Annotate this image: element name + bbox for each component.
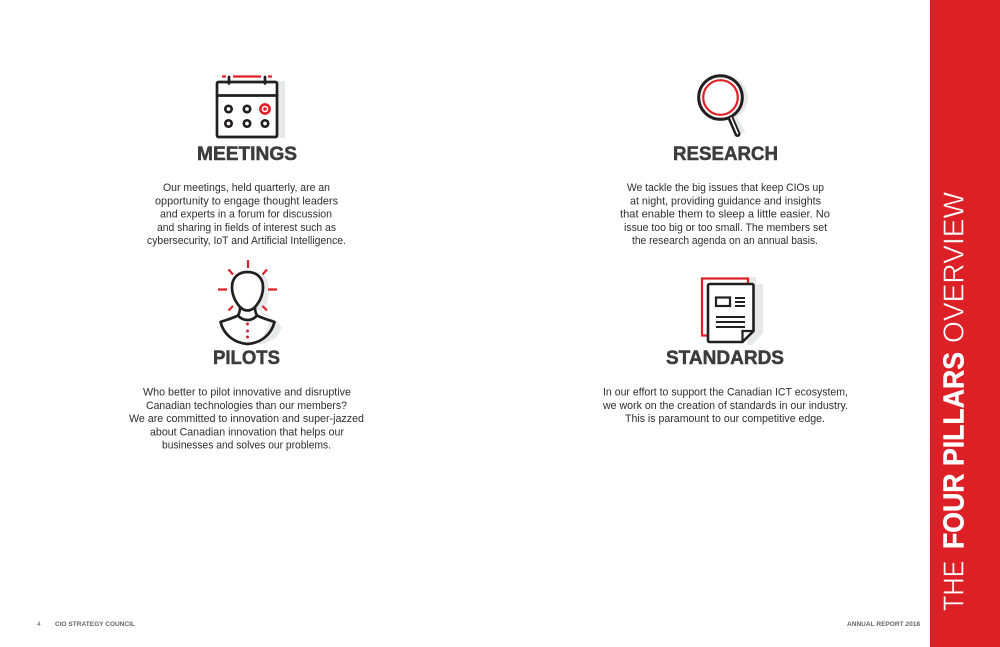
panel: standards (602, 277, 848, 425)
icon: head with rays (218, 260, 282, 344)
text block: pilots: about Canadian innovation that helps our (150, 426, 344, 438)
text block: meetings: cybersecurity, IoT and Artificial Intelligence. (147, 235, 346, 247)
text block: meetings: and sharing in fields of interest such as (157, 222, 336, 234)
icon: magnifying glass (699, 76, 748, 134)
icon: document (702, 277, 763, 345)
text block: research: We tackle the big issues that keep CIOs up (627, 182, 824, 194)
sidebar title: THE (938, 560, 970, 611)
text block: standards: In our effort to support the Canadian ICT ecosystem, (603, 386, 848, 398)
sidebar title: OVERVIEW (938, 192, 970, 343)
text block: standards: This is paramount to our competitive edge. (625, 413, 825, 425)
sidebar (930, 0, 1000, 647)
text block: pilots (129, 386, 364, 452)
text block: pilots: Canadian technologies than our members? (146, 400, 347, 412)
text block: research: that enable them to sleep a little easier. No (620, 209, 830, 221)
footer: organisation: CIO STRATEGY COUNCIL (55, 621, 135, 628)
panel: research (620, 76, 830, 247)
text block: research: the research agenda on an annual basis. (632, 235, 818, 247)
text block: meetings: Our meetings, held quarterly, are an (163, 182, 330, 194)
text block: pilots: businesses and solves our problems. (162, 440, 331, 452)
panel: pilots (129, 260, 364, 452)
panel: meetings (147, 76, 346, 247)
footer: report title: ANNUAL REPORT 2018 (847, 621, 920, 628)
heading: research: RESEARCH (673, 144, 778, 165)
icon: calendar (217, 76, 285, 138)
text block: pilots: Who better to pilot innovative and disruptive (143, 386, 351, 398)
sidebar title: FOUR PILLARS (938, 352, 970, 549)
text block: research (620, 182, 830, 247)
footer: page number: 4 (37, 621, 41, 628)
text block: research: issue too big or too small. The members set (624, 222, 828, 234)
text block: pilots: We are committed to innovation and super-jazzed (129, 413, 364, 425)
heading: pilots: PILOTS (213, 348, 280, 369)
text block: meetings (147, 182, 346, 247)
heading: standards: STANDARDS (666, 348, 784, 369)
sidebar title (938, 192, 970, 611)
heading: meetings: MEETINGS (197, 144, 297, 165)
text block: meetings: and experts in a forum for discussion (160, 209, 332, 221)
text block: meetings: opportunity to engage thought leaders (155, 195, 338, 207)
text block: standards: we work on the creation of standards in our industry. (602, 400, 848, 412)
text block: research: at night, providing guidance and insights (630, 195, 821, 207)
text block: standards (602, 386, 848, 425)
